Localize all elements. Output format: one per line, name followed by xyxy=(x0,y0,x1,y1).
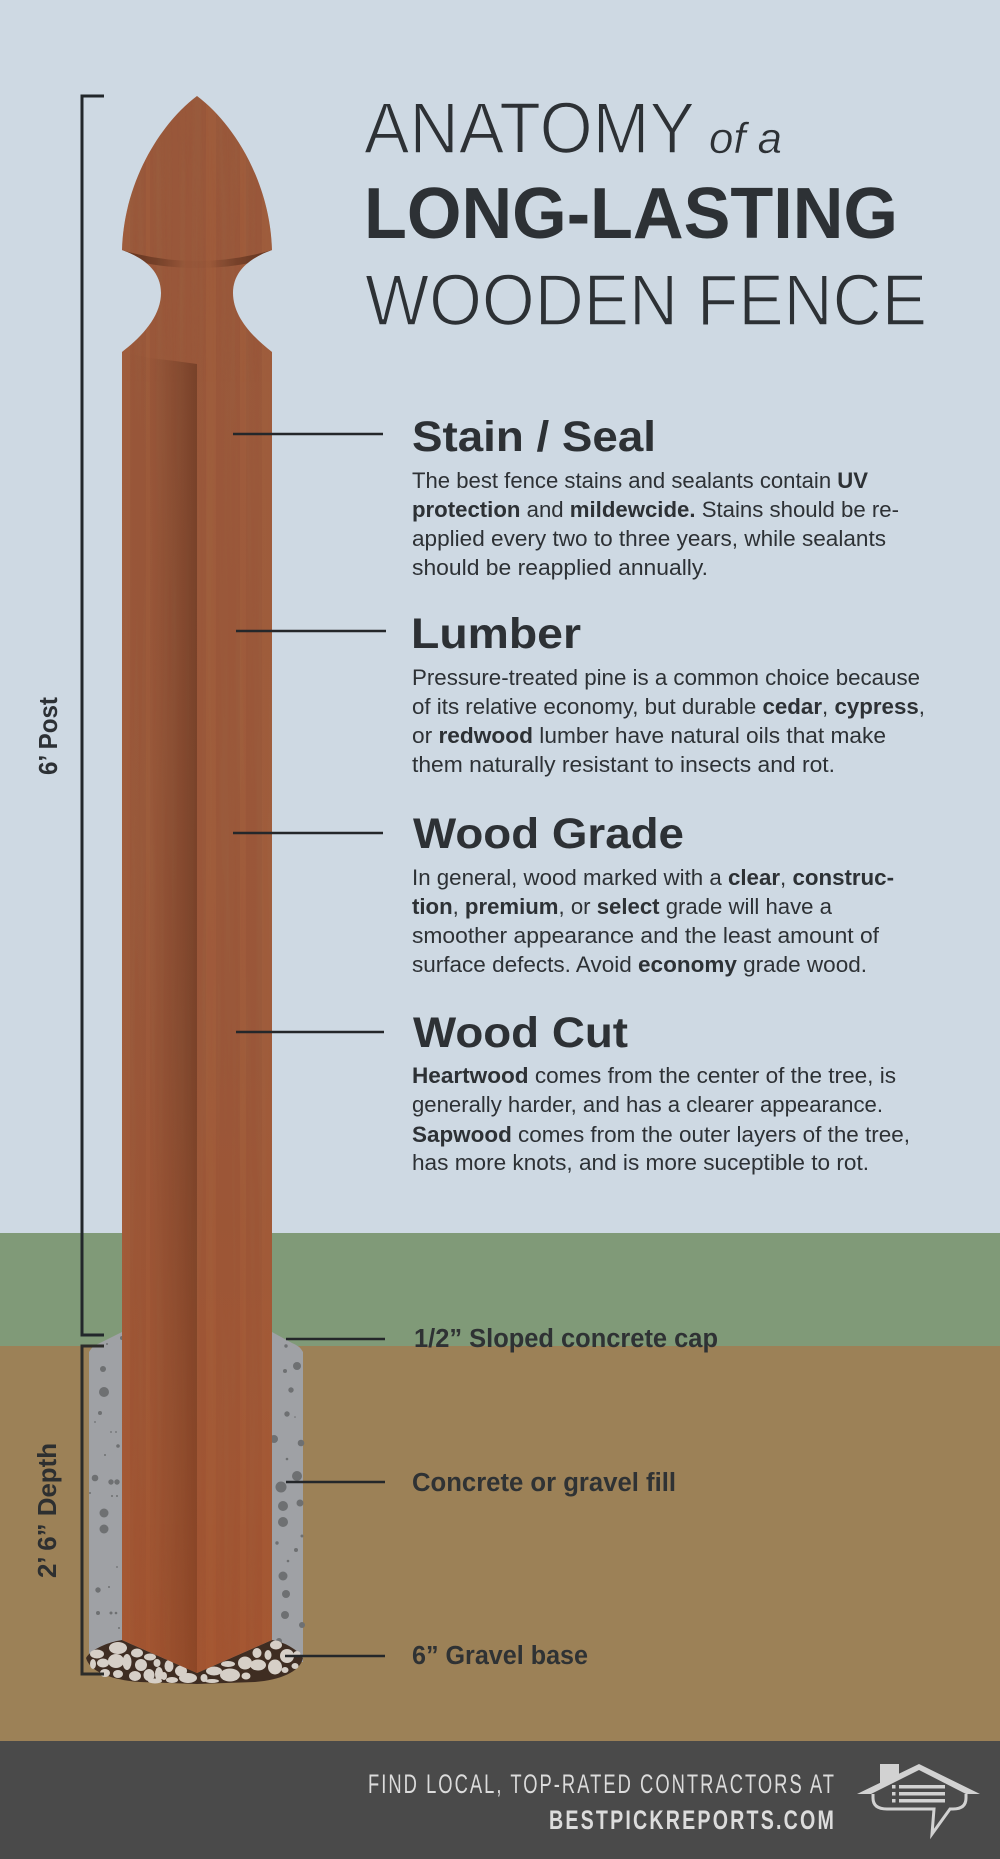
panel: lumber: of its relative economy, but durable cedar, cypress, xyxy=(412,694,925,719)
panel: lumber: them naturally resistant to insects and rot. xyxy=(412,752,835,777)
title xyxy=(364,89,927,341)
footer text xyxy=(368,1769,836,1835)
panel: stain / seal: should be reapplied annually. xyxy=(412,555,708,580)
panel: wood cut: Sapwood comes from the outer layers of the tree, xyxy=(412,1122,910,1147)
panel: lumber: or redwood lumber have natural oils that make xyxy=(412,723,886,748)
footer bar xyxy=(0,1741,1000,1859)
panel: stain / seal: protection and mildewcide. Stains should be re- xyxy=(412,497,899,522)
panel: lumber: Lumber xyxy=(411,610,581,658)
background: sky xyxy=(0,0,1000,1234)
icon: best pick reports logo xyxy=(857,1764,980,1834)
bracket: 6 foot post: 6’ Post xyxy=(33,697,63,775)
background: grass xyxy=(0,1233,1000,1347)
panel: stain / seal xyxy=(233,413,899,580)
panel: lumber: Pressure-treated pine is a common choice because xyxy=(412,665,920,690)
title: ANATOMY xyxy=(364,89,695,169)
panel: wood grade: Wood Grade xyxy=(413,810,684,858)
panel: wood grade: surface defects. Avoid economy grade wood. xyxy=(412,952,867,977)
panel: wood grade: In general, wood marked with a clear, construc- xyxy=(412,865,894,890)
panel: wood cut: generally harder, and has a clearer appearance. xyxy=(412,1092,883,1117)
label: gravel base: 6” Gravel base xyxy=(412,1642,588,1670)
bracket: 2 foot 6 depth: 2’ 6” Depth xyxy=(32,1443,62,1578)
panel: wood grade xyxy=(233,810,894,977)
title: LONG-LASTING xyxy=(364,174,898,254)
post left face shading xyxy=(161,360,197,1673)
panel: stain / seal: applied every two to three years, while sealants xyxy=(412,526,886,551)
panel: wood cut: Heartwood comes from the center of the tree, is xyxy=(412,1063,896,1088)
panel: lumber xyxy=(236,610,925,777)
panel: wood cut: Wood Cut xyxy=(413,1009,628,1057)
post lower tint xyxy=(122,1211,272,1673)
bracket: 2 foot 6 depth xyxy=(32,1346,104,1674)
title: WOODEN FENCE xyxy=(365,261,927,341)
footer text: BESTPICKREPORTS.COM xyxy=(549,1805,836,1835)
wood light streaks xyxy=(122,106,272,352)
bracket: 6 foot post xyxy=(33,96,104,1335)
panel: stain / seal: Stain / Seal xyxy=(412,413,656,461)
label: concrete or gravel fill: Concrete or gravel fill xyxy=(412,1469,676,1497)
label: sloped concrete cap: 1/2” Sloped concrete cap xyxy=(414,1325,718,1353)
fence post xyxy=(118,90,276,1680)
panel: wood grade: smoother appearance and the least amount of xyxy=(412,923,880,948)
panel: stain / seal: The best fence stains and sealants contain UV xyxy=(412,468,868,493)
panel: wood grade: tion, premium, or select grade will have a xyxy=(412,894,832,919)
gravel base xyxy=(86,1640,303,1684)
concrete footing xyxy=(89,1332,305,1662)
background: soil xyxy=(0,1346,1000,1742)
panel: wood cut: has more knots, and is more suceptible to rot. xyxy=(412,1150,869,1175)
title: of a xyxy=(709,114,782,163)
cap underside shadow xyxy=(122,250,272,268)
panel: wood cut xyxy=(236,1009,910,1175)
